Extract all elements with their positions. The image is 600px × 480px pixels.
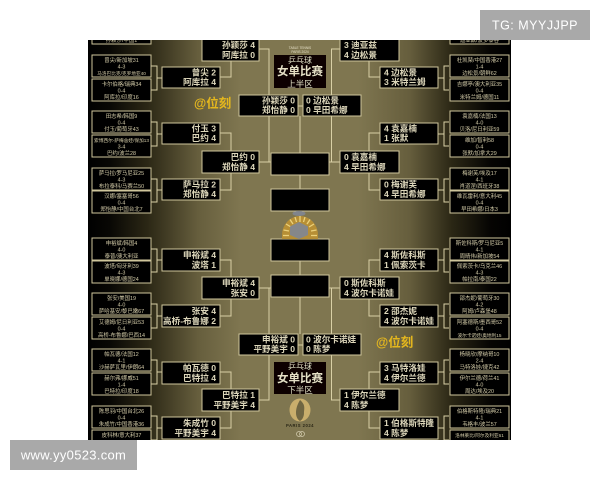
match box: R6: 早田希娜/日本3 (461, 205, 498, 213)
match box: R6 (450, 191, 509, 213)
match box: L12: 赫尔弗/挪威51 (104, 374, 139, 382)
empty semifinal box lower 1 (271, 239, 329, 261)
match box: L1: 马洛巴比克/克罗地亚40 (97, 70, 146, 77)
quarterfinal: 孙颖莎 vs 郑怡静: 孙颖莎 0 (262, 94, 295, 106)
match box: top left partial: 孙颖莎/中国1 (106, 36, 137, 44)
match: 巴约 vs 郑怡静 (202, 151, 259, 173)
match box: R5: 4-1 (476, 178, 483, 184)
match box: R2: 吉娜亭/澳大利亚35 (457, 80, 502, 88)
icon: medal (282, 211, 318, 239)
match: 迪亚兹 vs 边松景: 3 迪亚兹 (344, 39, 377, 50)
match box: L7: 泰普/澳大利亚 (105, 252, 139, 260)
match box: R5 (450, 168, 509, 190)
quarterfinal: 边松景 vs 早田希娜: 0 边松景 (306, 94, 339, 106)
match: 马特洛娃 vs 伊尔兰德 (380, 362, 438, 384)
header: upper half: TABLE TENNIS (289, 46, 311, 50)
match box: R12: 周达/埃及20 (465, 387, 494, 395)
match: 萨马拉 vs 郑怡静 (162, 178, 220, 200)
match box: L3: 0-4 (118, 120, 125, 126)
match: 斯佐科斯 vs 佩索茨卡 (380, 249, 438, 271)
header: upper half: PARIS 2024 (291, 50, 309, 54)
match box: R12: 伊尔兰德/荷兰41 (460, 374, 499, 382)
right first-round column (450, 22, 509, 452)
match box: L9 (92, 293, 151, 315)
match box: R9 (450, 293, 509, 315)
match: 帕瓦德 vs 巴特拉 (162, 362, 220, 384)
match box: R2: 0-4 (476, 88, 483, 94)
match box: R13: 韦格丰/波兰57 (462, 420, 497, 428)
header: lower half: 乒乓球 (288, 361, 312, 371)
match: 萨马拉 vs 郑怡静: 萨马拉 2 (183, 178, 216, 190)
match box: L8 (92, 261, 151, 283)
match box: R9: 4-2 (476, 302, 483, 308)
match box: L9: 萨哈基安/黎巴嫩67 (99, 307, 144, 315)
header: upper half: 女单比赛 (277, 64, 323, 78)
match: 梅谢芙 vs 早田希娜 (380, 178, 438, 200)
match: 边松景 vs 米特兰姆: 3 米特兰姆 (384, 76, 426, 87)
match: 曾尖 vs 阿库拉 (162, 66, 220, 88)
match: 伯格斯特隆 vs 陈梦: 4 陈梦 (384, 427, 409, 438)
quarterfinal: 波尔卡诺娃 vs 陈梦: 0 陈梦 (306, 343, 331, 354)
match: 斯佐科斯 vs 佩索茨卡: 4 斯佐科斯 (384, 249, 426, 260)
match box: R4 (450, 135, 509, 157)
match: 付玉 vs 巴约 (162, 122, 220, 144)
left round of 16 (162, 66, 220, 439)
match box: R5: 梅谢芙/埃及17 (462, 169, 497, 177)
match box: R9: 阿姆/卢森堡48 (462, 307, 497, 315)
quarterfinal: 边松景 vs 早田希娜 (303, 94, 361, 116)
match box: L12 (92, 373, 151, 395)
match: 邵杰妮 vs 波尔卡诺娃: 2 邵杰妮 (384, 305, 417, 316)
match box: L8: 单晓娜/德国24 (104, 275, 139, 283)
match: 朱成竹 vs 平野美宇: 平野美宇 4 (174, 427, 216, 438)
match box: R13 (450, 406, 509, 428)
match box: R10: 波尔卡诺娃/奥地利15 (457, 332, 502, 339)
match box: R14 (450, 430, 510, 440)
match box: L6: 汉娜/塞塞哥56 (104, 192, 139, 200)
match: 袁嘉楠 vs 张默 (380, 122, 438, 144)
match: 伊尔兰德 vs 陈梦 (340, 389, 399, 411)
match box: R3: 袁嘉楠/法国13 (462, 112, 497, 120)
match box: L2: 阿库拉/印度16 (104, 93, 139, 101)
match: 袁嘉楠 vs 早田希娜: 0 袁嘉楠 (344, 151, 377, 162)
match: 张安 vs 高桥-布鲁娜 (162, 305, 220, 327)
match box: R4: 维加/智利58 (465, 136, 494, 144)
match: 斯佐科斯 vs 波尔卡诺娃: 0 斯佐科斯 (344, 277, 386, 288)
match box: R10: 阿塞德斯/墨西哥52 (457, 318, 502, 326)
match box: L9: 张安/美国19 (107, 294, 136, 302)
match box: R7 (450, 238, 509, 260)
match: 伊尔兰德 vs 陈梦: 4 陈梦 (344, 399, 369, 410)
header: upper half: 乒乓球 (288, 55, 312, 65)
match box: R11: 杨晓欣/摩纳哥10 (460, 350, 499, 358)
match: 马特洛娃 vs 伊尔兰德: 3 马特洛娃 (384, 362, 426, 373)
match: 付玉 vs 巴约: 巴约 4 (192, 132, 216, 143)
match: 马特洛娃 vs 伊尔兰德: 4 伊尔兰德 (384, 372, 426, 383)
watermark: right @位刻: @位刻 (376, 334, 413, 350)
match box: R11: 马特洛娃/捷克42 (460, 363, 499, 371)
match box: L11 (92, 349, 151, 371)
match box: L12: 巴特拉/印度18 (104, 387, 139, 395)
match: 梅谢芙 vs 早田希娜: 0 梅谢芙 (384, 178, 417, 190)
quarterfinal: 申裕斌 vs 平野美宇: 平野美宇 0 (253, 343, 295, 354)
match: 申裕斌 vs 张安 (202, 277, 259, 299)
watermark: TG label: TG: MYYJJPP (492, 18, 578, 32)
match box: L2 (92, 79, 151, 101)
match box: L10 (92, 317, 151, 339)
match box: R14: 洛林莱比/阿尔及利亚61 (455, 432, 504, 439)
match: 袁嘉楠 vs 张默: 1 张默 (384, 132, 409, 143)
match: 斯佐科斯 vs 波尔卡诺娃 (340, 277, 399, 299)
match box: R13: 4-1 (476, 416, 483, 422)
match box: R8: 佩索茨卡/乌克兰46 (457, 262, 502, 270)
match: 申裕斌 vs 波塔: 申裕斌 4 (183, 249, 216, 260)
match: 邵杰妮 vs 波尔卡诺娃: 4 波尔卡诺娃 (384, 315, 435, 326)
match box: L1: 4-3 (118, 64, 125, 70)
match: 袁嘉楠 vs 张默: 4 袁嘉楠 (384, 122, 417, 134)
icon: Paris 2024 logo (286, 398, 314, 436)
match box: L1: 曾尖/新加坡31 (104, 56, 139, 64)
match box: R4: 0-4 (476, 144, 483, 150)
header: upper half: 上半区 (287, 79, 313, 89)
header: lower half (274, 361, 326, 395)
match box: R8: 4-3 (476, 270, 483, 276)
match box: L13: 陈思羽/中国台北26 (99, 407, 144, 415)
match box: L5: 萨马拉/罗马尼亚25 (99, 169, 144, 177)
match box: R2: 米特兰姆/德国11 (460, 93, 499, 101)
match box: top left partial (92, 40, 152, 44)
empty semifinal box upper 1 (271, 153, 329, 175)
match box: L14 (92, 430, 152, 440)
watermark: website: www.yy0523.com (20, 448, 126, 462)
match: 梅谢芙 vs 早田希娜: 4 早田希娜 (384, 188, 426, 199)
bracket poster (88, 22, 511, 452)
match: 巴特拉 vs 平野美宇: 平野美宇 4 (213, 399, 255, 410)
match box: L11: 4-1 (118, 358, 125, 364)
match box: L13: 0-4 (118, 416, 125, 422)
match: 巴约 vs 郑怡静: 巴约 0 (231, 151, 255, 162)
watermark: website (10, 440, 137, 470)
match box: L7: 4-0 (118, 248, 125, 254)
match box: L2: 卡尔伯格/瑞典34 (102, 80, 141, 88)
match box: L12: 1-4 (118, 382, 125, 388)
match: 曾尖 vs 阿库拉: 阿库拉 4 (183, 76, 216, 87)
match: 伯格斯特隆 vs 陈梦 (380, 417, 438, 439)
match box: L10: 艾德姆/尼日利亚53 (99, 318, 144, 326)
match box: L6: 0-4 (118, 200, 125, 206)
match box: R4: 张默/加拿大29 (462, 149, 497, 157)
match box: L6 (92, 191, 151, 213)
match box: R8: 帕拉南/泰国22 (462, 275, 497, 283)
match box: L2: 0-4 (118, 88, 125, 94)
match box: R7: 4-1 (476, 248, 483, 254)
match: 袁嘉楠 vs 早田希娜: 4 早田希娜 (344, 161, 386, 172)
match box: R3 (450, 111, 509, 133)
match box: L1 (92, 55, 151, 77)
match: 袁嘉楠 vs 早田希娜 (340, 151, 399, 173)
match: 帕瓦德 vs 巴特拉: 帕瓦德 0 (183, 362, 216, 373)
match: 边松景 vs 米特兰姆: 4 边松景 (384, 66, 417, 78)
match box: L3: 付玉/葡萄牙43 (104, 125, 139, 133)
match box: L10: 高桥-布鲁娜/巴西14 (98, 331, 145, 339)
match box: L8: 4-3 (118, 270, 125, 276)
match box: R8 (450, 261, 509, 283)
match box: L5: 4-3 (118, 178, 125, 184)
match box: R3: 4-0 (476, 120, 483, 126)
match: 迪亚兹 vs 边松景 (340, 30, 399, 61)
match box: R11: 2-4 (476, 358, 483, 364)
match box: R1 (450, 55, 509, 77)
quarterfinal: 波尔卡诺娃 vs 陈梦 (303, 334, 361, 355)
header: lower half: 女单比赛 (277, 371, 323, 385)
empty semifinal box lower 2 (271, 275, 329, 297)
match: 巴特拉 vs 平野美宇: 巴特拉 1 (222, 389, 255, 400)
watermark: TG label (480, 10, 590, 40)
match box: R7: 斯佐科斯/罗马尼亚5 (456, 239, 503, 247)
match: 申裕斌 vs 张安: 张安 0 (231, 287, 255, 298)
quarterfinal: 申裕斌 vs 平野美宇: 申裕斌 0 (262, 334, 295, 344)
match box: R3: 贝洛/尼日利亚59 (460, 125, 499, 133)
match box: R1: 边松景/朝鲜62 (462, 69, 497, 77)
match box: R7: 周晴伟/新加坡54 (460, 252, 499, 260)
match: 伯格斯特隆 vs 陈梦: 1 伯格斯特隆 (384, 417, 435, 428)
quarterfinal: 孙颖莎 vs 郑怡静: 郑怡静 0 (262, 104, 295, 115)
match box: L9: 4-0 (118, 302, 125, 308)
match box: R9: 邵杰妮/葡萄牙30 (460, 294, 499, 302)
quarterfinal: 波尔卡诺娃 vs 陈梦: 0 波尔卡诺娃 (306, 334, 357, 344)
match box: L6: 郑怡静/中国台北7 (100, 205, 143, 213)
match: 斯佐科斯 vs 佩索茨卡: 1 佩索茨卡 (384, 259, 426, 270)
match box: R1: 杜凯琹/中国香港27 (457, 56, 502, 64)
match box: L14: 皮科林/意大利37 (102, 431, 141, 439)
match: 孙颖莎 vs 阿库拉 (202, 30, 259, 61)
match box: L4 (92, 135, 151, 157)
right round of 16 (380, 66, 438, 439)
match box: L4: 3-4 (118, 144, 125, 150)
match box: R11 (450, 349, 509, 371)
match box: top right partial (450, 40, 510, 44)
match: 孙颖莎 vs 阿库拉: 孙颖莎 4 (222, 39, 255, 50)
match box: R1: 1-4 (476, 64, 483, 70)
match: 萨马拉 vs 郑怡静: 郑怡静 4 (183, 188, 216, 199)
match: 付玉 vs 巴约: 付玉 3 (192, 122, 216, 134)
match box: R13: 伯格斯特隆/瑞典21 (457, 407, 502, 415)
match box: R12: 4-0 (476, 382, 483, 388)
match box: R10: 0-4 (476, 326, 483, 332)
match box: R5: 肖道涅/西班牙38 (460, 182, 499, 190)
empty semifinal box upper 2 (271, 189, 329, 211)
match: 巴约 vs 郑怡静: 郑怡静 4 (222, 161, 255, 172)
watermark: left @位刻: @位刻 (194, 96, 231, 110)
match box: L4: 巴约/波兰28 (107, 149, 136, 157)
match: 孙颖莎 vs 阿库拉: 阿库拉 0 (222, 49, 255, 60)
quarterfinal: 孙颖莎 vs 郑怡静 (239, 94, 298, 116)
match box: L7 (92, 238, 151, 260)
match: 斯佐科斯 vs 波尔卡诺娃: 4 波尔卡诺娃 (344, 287, 395, 298)
quarterfinal: 申裕斌 vs 平野美宇 (239, 334, 298, 355)
match: 张安 vs 高桥-布鲁娜: 高桥-布鲁娜 2 (163, 315, 216, 326)
match: 边松景 vs 米特兰姆 (380, 66, 438, 88)
match: 张安 vs 高桥-布鲁娜: 张安 4 (192, 305, 216, 316)
icon: Paris 2024 logo: PARIS 2024 (286, 423, 314, 428)
match: 朱成竹 vs 平野美宇: 朱成竹 0 (183, 417, 216, 428)
match box: L11: 帕瓦德/法国12 (104, 350, 139, 358)
match: 申裕斌 vs 波塔: 波塔 1 (192, 259, 216, 270)
match: 伊尔兰德 vs 陈梦: 1 伊尔兰德 (344, 389, 386, 400)
header: lower half: 下半区 (287, 385, 313, 395)
left first-round column (92, 22, 151, 452)
match box: L13 (92, 406, 151, 428)
header: upper half (274, 46, 326, 89)
match box: L7: 申裕斌/韩国4 (106, 239, 137, 247)
match box: R6: 0-4 (476, 200, 483, 206)
bracket connectors (151, 49, 449, 440)
match box: L13: 朱成竹/中国香港36 (99, 420, 144, 428)
left round of 8 (202, 30, 259, 411)
match box: R6: 维瓦雷利/意大利45 (457, 192, 502, 200)
match: 帕瓦德 vs 巴特拉: 巴特拉 4 (183, 372, 216, 383)
match: 巴特拉 vs 平野美宇 (202, 389, 259, 411)
match box: L4: 索博西尔-萨梅舍娃/保加13 (94, 137, 149, 144)
quarterfinal: 边松景 vs 早田希娜: 0 早田希娜 (306, 104, 348, 115)
match: 朱成竹 vs 平野美宇 (162, 417, 220, 439)
match box: L3 (92, 111, 151, 133)
match box: L3: 田志希/韩国9 (106, 112, 137, 120)
right round of 8 (340, 30, 399, 411)
match box: R2 (450, 79, 509, 101)
match: 邵杰妮 vs 波尔卡诺娃 (380, 305, 438, 327)
match box: R10 (450, 317, 509, 339)
match box: L5 (92, 168, 151, 190)
match box: L10: 0-4 (118, 326, 125, 332)
match box: L5: 布拉泰科/马赛兰50 (99, 182, 144, 190)
match box: L11: 沙赫萨瓦里/伊朗64 (99, 363, 144, 371)
match box: R12 (450, 373, 509, 395)
match: 曾尖 vs 阿库拉: 曾尖 2 (192, 66, 216, 78)
match: 申裕斌 vs 波塔 (162, 249, 220, 271)
match box: top right partial: 迪亚兹/波多黎各 (460, 36, 500, 44)
match: 迪亚兹 vs 边松景: 4 边松景 (344, 49, 377, 60)
match box: L8: 波塔/匈牙利39 (104, 262, 139, 270)
match: 申裕斌 vs 张安: 申裕斌 4 (222, 277, 255, 288)
